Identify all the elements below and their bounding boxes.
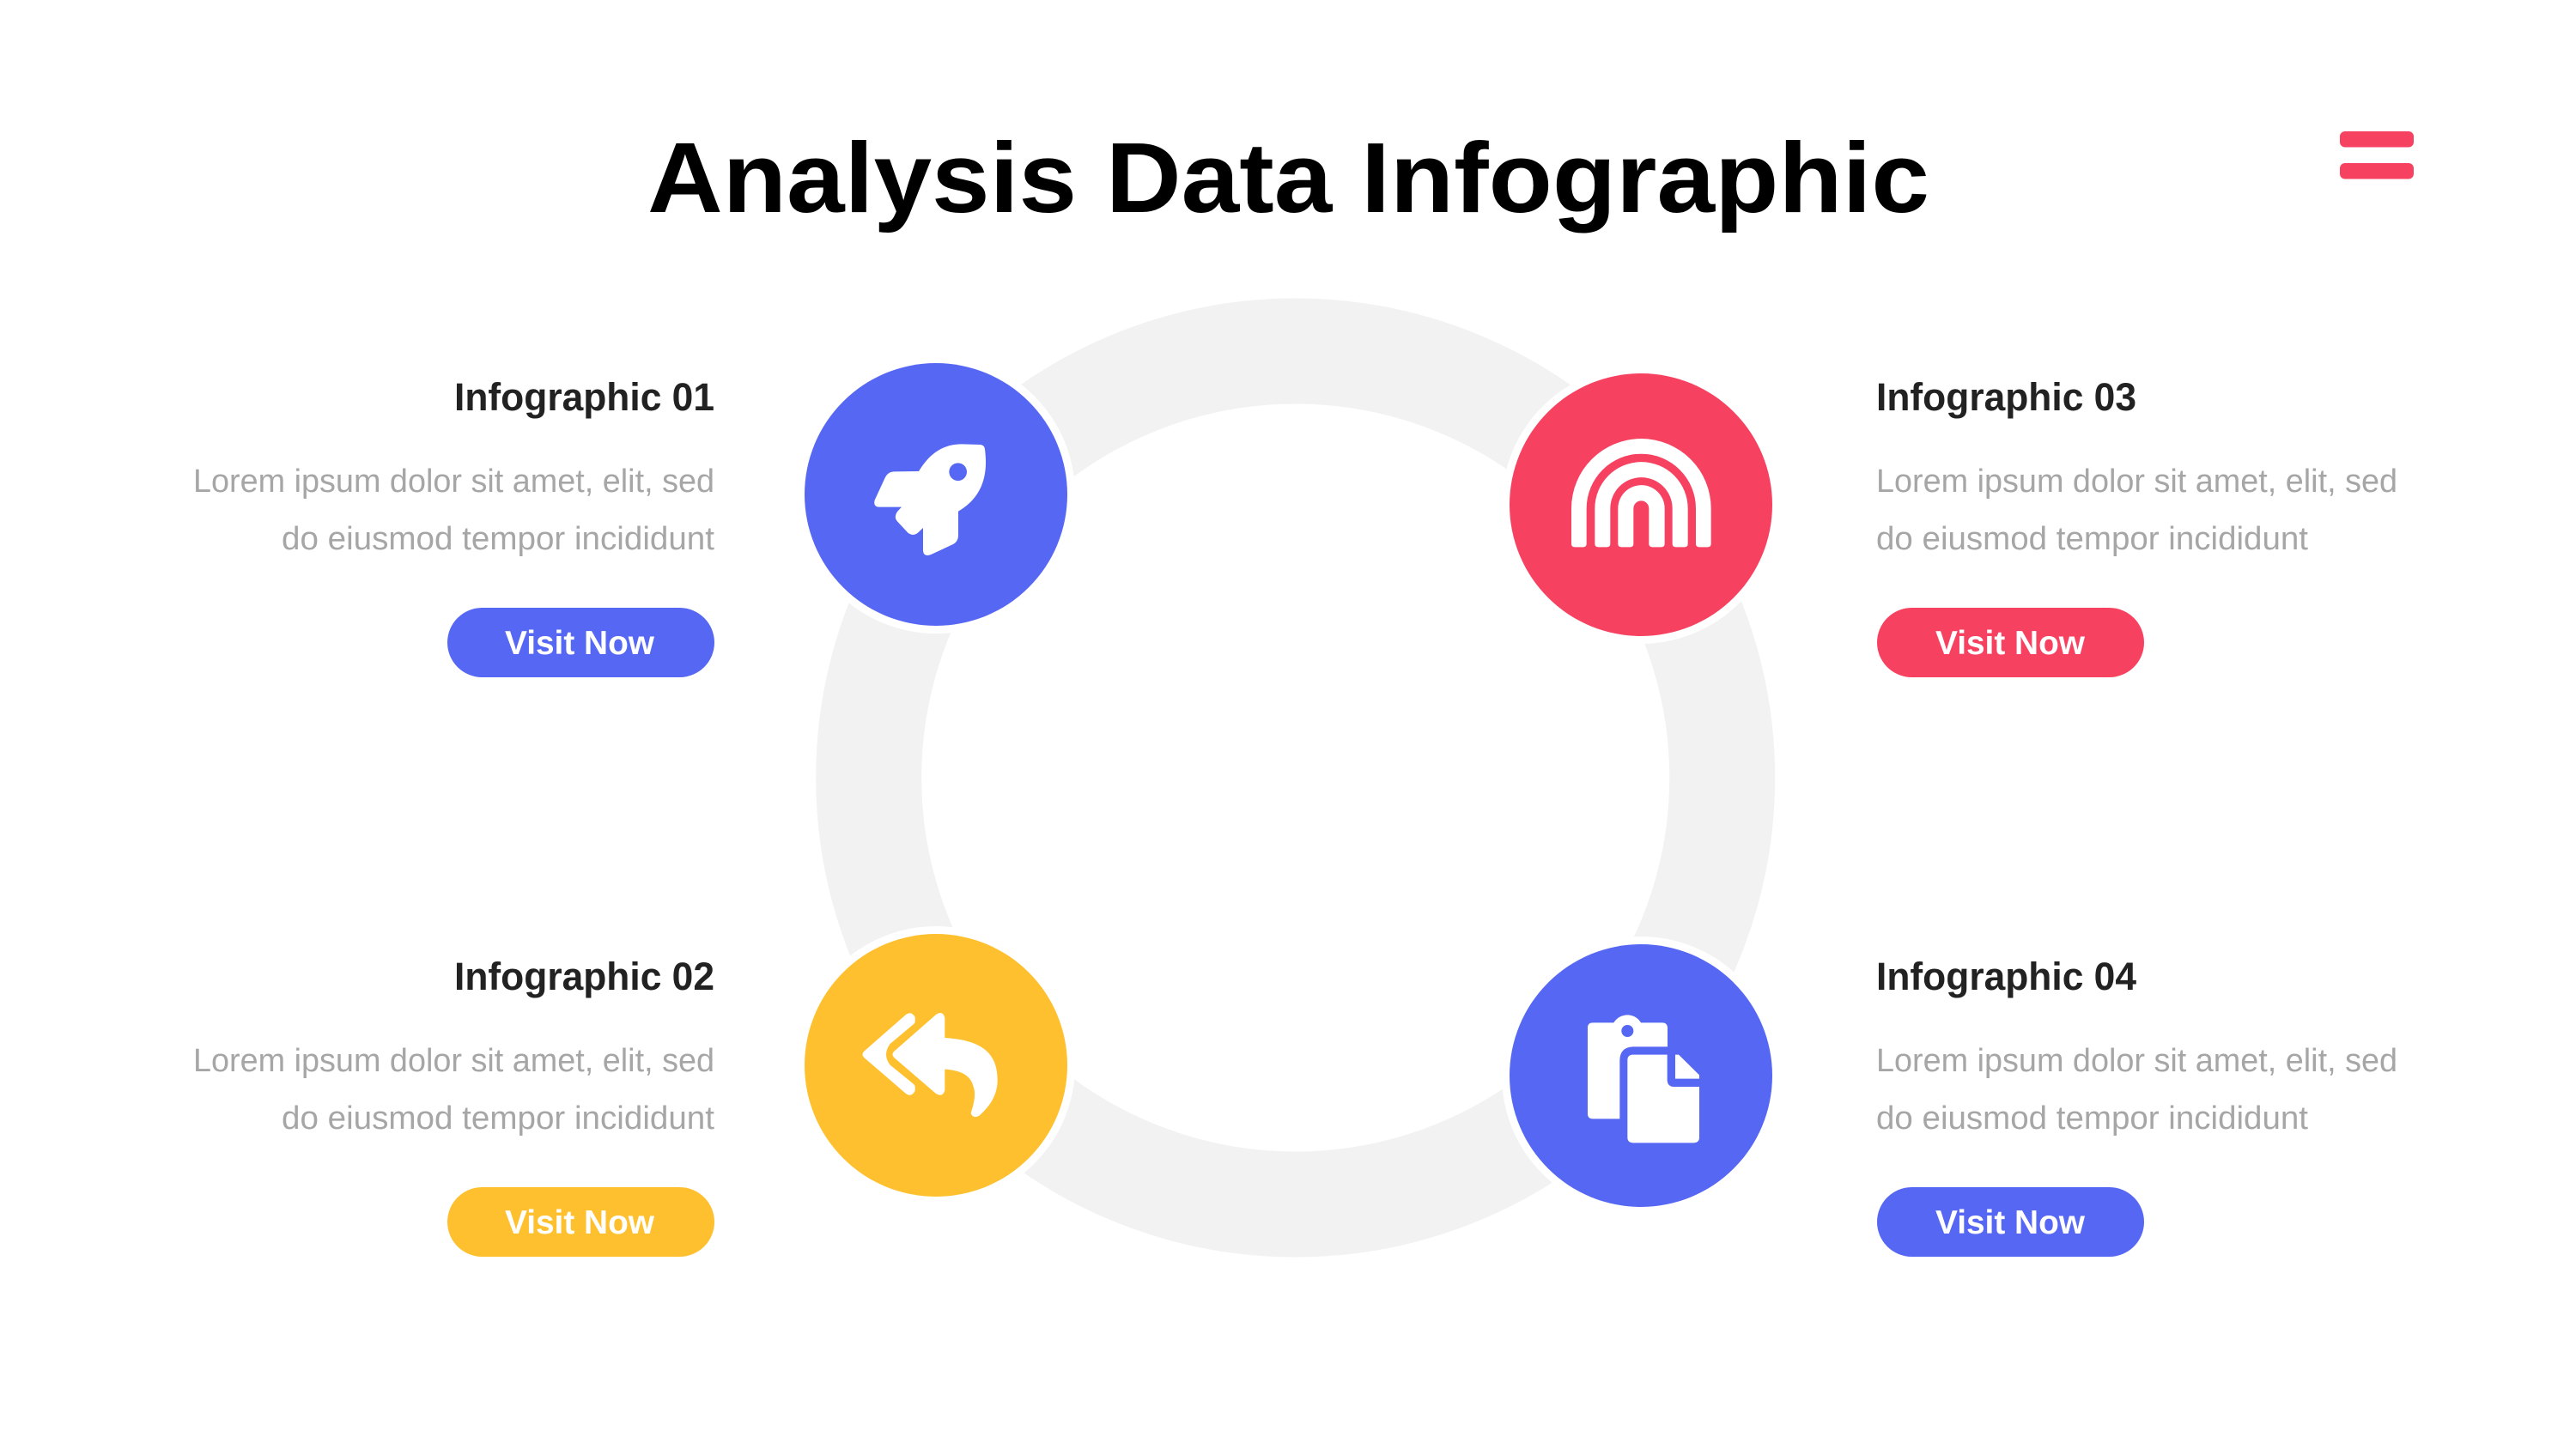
body text: Lorem ipsum dolor sit amet, elit, sed [193,1043,714,1079]
body text [193,464,714,557]
body text: do eiusmod tempor incididunt [282,521,714,557]
body text [1876,1043,2397,1137]
button: Visit Now [1935,625,2086,662]
icon: rainbow [1571,439,1711,547]
heading: Infographic 03 [1876,375,2136,419]
panel: infographic 01 [193,375,714,677]
panel: infographic 04 [1876,955,2397,1257]
heading: Infographic 04 [1876,955,2136,998]
icon: reply arrows [862,1013,998,1117]
body text [193,1043,714,1137]
body text [1876,464,2397,557]
button: Visit Now [505,625,655,662]
icon: documents [1588,1015,1699,1143]
node 02: reply arrows [797,926,1075,1204]
button [447,608,714,677]
icon: menu bars [2340,131,2414,179]
node 03: rainbow [1502,366,1780,644]
button [447,1187,714,1257]
body text: do eiusmod tempor incididunt [282,1100,714,1137]
button: Visit Now [505,1204,655,1241]
title: Analysis Data Infographic [647,122,1929,233]
heading: Infographic 02 [454,955,714,998]
ring [869,351,1722,1204]
node 01: rocket [797,355,1075,634]
body text: Lorem ipsum dolor sit amet, elit, sed [1876,464,2397,500]
button: Visit Now [1935,1204,2086,1241]
body text: Lorem ipsum dolor sit amet, elit, sed [1876,1043,2397,1079]
icon: rocket [874,444,986,555]
panel: infographic 03 [1876,375,2397,677]
body text: do eiusmod tempor incididunt [1876,1100,2308,1137]
body text: do eiusmod tempor incididunt [1876,521,2308,557]
body text: Lorem ipsum dolor sit amet, elit, sed [193,464,714,500]
panel: infographic 02 [193,955,714,1257]
heading: Infographic 01 [454,375,714,419]
button [1877,1187,2144,1257]
button [1877,608,2144,677]
node 04: documents [1502,937,1780,1215]
